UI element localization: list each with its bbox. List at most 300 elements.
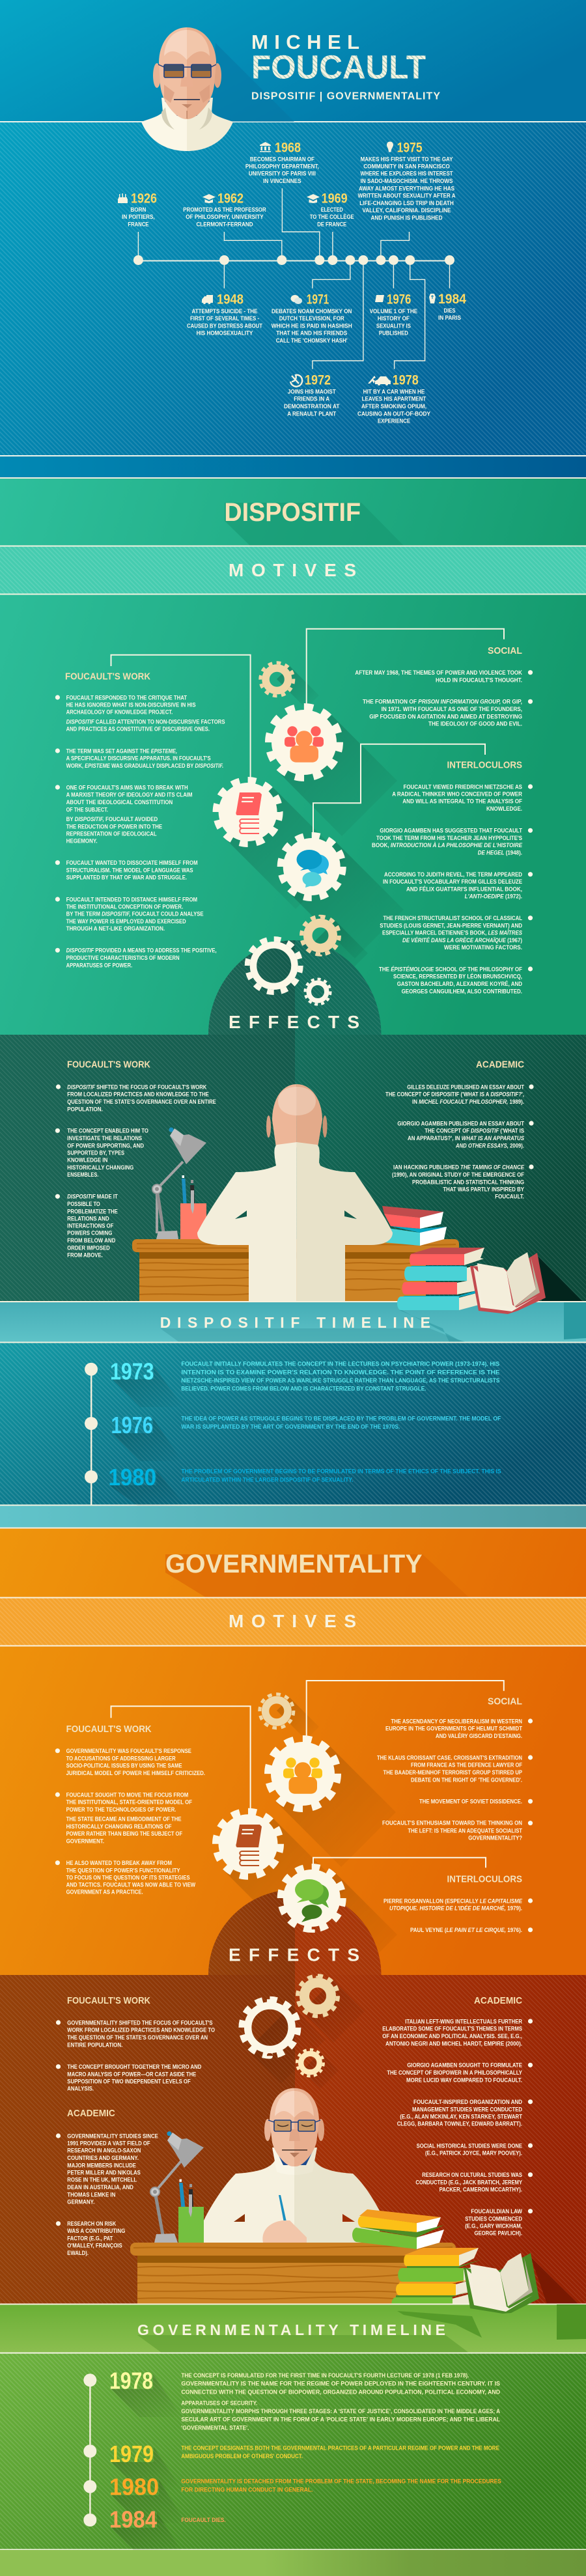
event 1948: HIS HOMOSEXUALITY	[197, 330, 253, 337]
gear shadows	[223, 666, 404, 1019]
text: motives foucault's work: POWER RATHER THAN BEING THE SUBJECT OF	[66, 1830, 182, 1837]
foreground book stack	[391, 2248, 482, 2311]
text: effects foucault's work: RELATIONS AND	[67, 1215, 109, 1222]
text: motives foucault's work: BY THE TERM DISPOSITIF, FOUCAULT COULD ANALYSE	[66, 911, 204, 917]
text: motives foucault's work: FOUCAULT'S WORK	[66, 1724, 152, 1735]
event 1978: EXPERIENCE	[378, 418, 410, 425]
text: effects foucault's work: ANALYSIS.	[67, 2086, 94, 2092]
text: motives interlocutors: INTERLOCULORS	[447, 1874, 522, 1885]
event 1969: ELECTED	[321, 206, 343, 213]
band: timeline heading	[0, 2304, 586, 2353]
text: motives foucault's work: AND PRACTICES AS CONSTITUTIVE OF DISCURSIVE ONES.	[66, 726, 210, 733]
text: motives social: GOVERNMENTALITY?	[468, 1835, 522, 1841]
event 1968: PHILOSOPHY DEPARTMENT,	[245, 163, 319, 169]
text: effects academic right: RESEARCH ON CULTURAL STUDIES WAS	[422, 2172, 522, 2178]
gear: interlocutors with speech bubbles	[281, 835, 343, 898]
event 1968: BECOMES CHAIRMAN OF	[250, 156, 314, 162]
text: effects academic right: GIORGIO AGAMBEN SOUGHT TO FORMULATE	[407, 2062, 522, 2069]
event 1975: MAKES HIS FIRST VISIT TO THE GAY	[361, 156, 453, 162]
text: motives interlocutors: DE HEGEL (1948).	[478, 849, 522, 856]
text: effects academic: PROBABILISTIC AND STATISTICAL THINKING	[412, 1179, 524, 1185]
text: effects foucault's work: QUESTION OF THE STATE'S GOVERNANCE OVER AN ENTIRE	[67, 1099, 216, 1105]
text: motives foucault's work: OF THE SUBJECT.	[66, 806, 108, 813]
event 1968: 1968	[275, 140, 301, 155]
figure: Foucault at desk	[204, 2088, 380, 2243]
text: effects foucault's work: POWERS COMING	[67, 1230, 112, 1237]
event 1975	[358, 140, 456, 221]
text: motives interlocutors: THE FRENCH STRUCTURALIST SCHOOL OF CLASSICAL	[383, 915, 522, 921]
event 1968: UNIVERSITY OF PARIS VIII	[249, 171, 316, 177]
event 1948: ATTEMPTS SUICIDE - THE	[191, 308, 258, 315]
title: MICHEL	[251, 31, 359, 53]
bottom band	[0, 1505, 586, 1528]
text: effects foucault's work: OF POWER SUPPORTING, AND	[67, 1142, 144, 1149]
text: effects academic left: ACADEMIC	[67, 2108, 115, 2119]
event 1978	[357, 373, 430, 425]
text: effects foucault's work: FROM BELOW AND	[67, 1237, 116, 1244]
text: effects academic: THAT WAS PARTLY INSPIRED BY	[443, 1186, 524, 1192]
connectors	[111, 1681, 504, 1868]
event 1976: HISTORY OF	[378, 315, 410, 322]
text: effects academic right	[382, 1995, 533, 2237]
text: effects academic right: THE CONCEPT OF BIOPOWER IN A PHILOSOPHICALLY	[387, 2069, 522, 2076]
text: motives foucault's work: GOVERNMENTALITY WAS FOUCAULT'S RESPONSE	[66, 1748, 191, 1754]
text: motives foucault's work: SOCIO-POLITICAL ISSUES BY USING THE SAME	[66, 1763, 182, 1769]
gear: large outline	[242, 1999, 298, 2056]
gear: social with people icon	[268, 1739, 337, 1809]
figure: Foucault from behind	[197, 1084, 393, 1302]
text: motives social: FROM FRANCE AS THE DEFENCE LAWYER OF	[411, 1762, 522, 1769]
text: motives foucault's work: TO FOCUS ON THE QUESTION OF ITS STRATEGIES	[66, 1874, 190, 1881]
text: effects academic left: 1991 PROVIDED A VAST FIELD OF	[67, 2140, 150, 2147]
text: effects academic right: ELABORATED SOME OF FOUCAULT'S THEMES IN TERMS	[382, 2026, 522, 2032]
text: motives social: EUROPE IN THE GOVERNMENTS OF HELMUT SCHMIDT	[385, 1726, 522, 1732]
entry 1973	[110, 1358, 500, 1393]
text: motives interlocutors: INTERLOCULORS	[447, 759, 522, 771]
text: motives foucault's work: A SPECIFICALLY DISCURSIVE APPARATUS. IN FOUCAULT'S	[66, 755, 211, 762]
text: motives foucault's work: POWER TO THE TECHNOLOGIES OF POWER.	[66, 1806, 176, 1813]
text: motives interlocutors: GIORGIO AGAMBEN HAS SUGGESTED THAT FOUCAULT	[380, 828, 522, 834]
event 1984: 1984	[438, 292, 466, 307]
event 1978: AFTER SMOKING OPIUM,	[361, 403, 426, 410]
entry 1976: WAR IS SUPPLANTED BY THE ART OF GOVERNMENT BY THE END OF THE 1970S.	[181, 1423, 400, 1431]
section: dispositif effects	[0, 1035, 586, 1302]
event 1976: SEXUALITY IS	[376, 322, 411, 329]
text: motives foucault's work: APPARATUSES OF POWER.	[66, 962, 132, 968]
dome: effects: EFFECTS	[229, 1012, 359, 1032]
text: motives foucault's work: FOUCAULT WANTED TO DISSOCIATE HIMSELF FROM	[66, 860, 198, 866]
timeline dots	[133, 255, 454, 265]
entry 1978: GOVERNMENTALITY IS THE NAME FOR THE REGIME OF POWER DEPLOYED IN THE EIGHTEENTH CENTURY. IT IS	[181, 2381, 501, 2388]
gear: large outline	[247, 939, 301, 992]
entry 1973: BELIEVED. POWER COMES FROM BELOW AND IS CHARACTERIZED BY CONSTANT STRUGGLE.	[181, 1386, 426, 1393]
text: motives foucault's work: THE QUESTION OF POWER'S FUNCTIONALITY	[66, 1867, 180, 1873]
entry 1980: 1980	[109, 2474, 159, 2500]
dome: effects	[208, 1890, 382, 1976]
text: effects foucault's work: THE CONCEPT ENABLED HIM TO	[67, 1128, 148, 1134]
dome: effects: EFFECTS	[229, 1944, 359, 1965]
bottom band	[0, 2550, 586, 2576]
event 1984	[429, 292, 466, 321]
event 1926: IN POITIERS,	[122, 214, 155, 220]
text: motives interlocutors: ACCORDING TO JUDITH REVEL, THE TERM APPEARED	[384, 871, 522, 878]
text: effects foucault's work: FOUCAULT'S WORK	[67, 1995, 150, 2006]
text: effects academic left: FACTOR (E.G., PAT	[67, 2235, 113, 2241]
gear: tan	[298, 1976, 338, 2016]
text: motives interlocutors: SCIENCE, REPRESENTED BY LÉON BRUNSCHVICQ,	[393, 973, 522, 980]
section: dispositif timeline	[0, 1248, 586, 1528]
event 1978: LEAVES HIS APARTMENT	[362, 396, 426, 402]
text: motives interlocutors: AND WILL AS INTEGRAL TO THE ANALYSIS OF	[402, 798, 522, 805]
text: effects academic right: FOUCAULDIAN LAW	[471, 2208, 522, 2215]
gear: small	[305, 979, 331, 1004]
text: motives foucault's work: DISPOSITIF CALLED ATTENTION TO NON-DISCURSIVE FACTORS	[66, 719, 225, 725]
event 1978: CAUSING AN OUT-OF-BODY	[357, 410, 430, 417]
text: motives foucault's work: HISTORICALLY CHANGING RELATIONS OF	[66, 1823, 172, 1830]
text: motives foucault's work: PRODUCTIVE CHARACTERISTICS OF MODERN	[66, 955, 180, 961]
text: motives interlocutors	[372, 759, 533, 994]
text: effects foucault's work: SUPPORTED BY, TYPES	[67, 1149, 124, 1156]
text: effects academic right: ACADEMIC	[474, 1995, 522, 2006]
text: effects foucault's work: WORK FROM LOCALIZED PRACTICES AND KNOWLEDGE TO	[67, 2027, 215, 2034]
band: motives: MOTIVES	[229, 560, 356, 580]
event 1969: TO THE COLLÈGE	[310, 213, 354, 220]
text: motives interlocutors: BOOK, INTRODUCTION À LA PHILOSOPHIE DE L'HISTOIRE	[372, 842, 523, 848]
text: motives foucault's work: STRUCTURALISM. THE MODEL OF LANGUAGE WAS	[66, 867, 193, 873]
text: motives interlocutors: GASTON BACHELARD, ALEXANDRE KOYRÉ, AND	[397, 980, 522, 987]
text: motives foucault's work: THE WAY POWER IS EMPLOYED AND EXERCISED	[66, 918, 186, 925]
text: motives social: THE MOVEMENT OF SOVIET DISSIDENCE.	[419, 1799, 522, 1805]
gear: foucault's work with book icon	[216, 1812, 281, 1877]
text: motives foucault's work: JURIDICAL MODEL OF POWER HE HIMSELF CRITICIZED.	[66, 1770, 205, 1776]
text: motives foucault's work: WORK, EPISTEME WAS GRADUALLY DISPLACED BY DISPOSITIF.	[66, 763, 223, 769]
lamp	[152, 1127, 206, 1239]
event 1962: 1962	[217, 191, 244, 206]
event 1971: THAT HE AND HIS FRIENDS	[276, 330, 347, 337]
text: motives interlocutors: ESPECIALLY MARCEL DETIENNE'S BOOK, LES MAÎTRES	[382, 929, 523, 936]
text: effects academic left: THOMAS LEMKE IN	[67, 2191, 116, 2198]
event 1976: 1976	[387, 292, 411, 307]
gear shadows	[247, 1980, 365, 2089]
entry 1973: NIETZSCHE-INSPIRED VIEW OF POWER AS WARLIKE STRUGGLE RATHER THAN LANGUAGE, AS THE STRUCTURALISTS	[181, 1377, 500, 1384]
gear: interlocutors with speech bubbles	[281, 1867, 343, 1929]
text: motives foucault's work	[55, 671, 225, 968]
entry 1980: FOR DIRECTING HUMAN CONDUCT IN GENERAL.	[181, 2486, 313, 2493]
text: effects academic left: RESEARCH ON RISK	[67, 2220, 117, 2227]
event 1975: COMMUNITY IN SAN FRANCISCO	[363, 163, 450, 169]
section: governmentality timeline	[0, 2253, 586, 2576]
text: effects academic: GIORGIO AGAMBEN PUBLISHED AN ESSAY ABOUT	[397, 1120, 524, 1127]
section: governmentality effects	[0, 1975, 586, 2311]
text: effects academic: ACADEMIC	[476, 1059, 524, 1071]
event 1972: FRIENDS IN A	[294, 396, 330, 402]
event 1975: LIFE-CHANGING LSD TRIP IN DEATH	[359, 200, 454, 206]
text: effects foucault's work: MACRO ANALYSIS OF POWER—OR CAST ASIDE THE	[67, 2071, 196, 2077]
entry 1984: FOUCAULT DIES.	[181, 2517, 226, 2524]
text: motives social: AFTER MAY 1968, THE THEMES OF POWER AND VIOLENCE TOOK	[355, 669, 522, 676]
text: effects foucault's work: GOVERNMENTALITY SHIFTED THE FOCUS OF FOUCAULT'S	[67, 2019, 213, 2026]
text: effects academic right: ITALIAN LEFT-WING INTELLECTUALS FURTHER	[405, 2018, 522, 2024]
event 1978: HIT BY A CAR WHEN HE	[363, 389, 425, 395]
gear: small tan	[260, 663, 294, 696]
text: effects foucault's work: POSSIBLE TO	[67, 1201, 100, 1207]
text: motives social: SOCIAL	[488, 1696, 522, 1707]
text: motives foucault's work: THROUGH A NET-LIKE ORGANIZATION.	[66, 925, 165, 932]
heading: DISPOSITIF: DISPOSITIF	[224, 498, 361, 527]
text: effects academic left: DEAN IN AUSTRALIA, AND	[67, 2184, 133, 2191]
band: motives	[0, 1597, 586, 1646]
entry 1973: FOUCAULT INITIALLY FORMULATES THE CONCEPT IN THE LECTURES ON PSYCHIATRIC POWER (1973-1974). HIS	[181, 1361, 500, 1368]
text: motives social	[377, 1696, 533, 1841]
biography timeline connectors	[138, 188, 450, 369]
entry 1976: THE IDEA OF POWER AS STRUGGLE BEGINS TO BE DISPLACED BY THE PROBLEM OF GOVERNMENT. THE MODEL OF	[181, 1416, 501, 1423]
text: effects academic right: (E.G., ALAN MCKINLAY, KEN STARKEY, STEWART	[400, 2113, 522, 2120]
heading: GOVERNMENTALITY	[165, 1550, 469, 1597]
text: motives social: SOCIAL	[488, 645, 522, 656]
event 1948	[187, 292, 262, 337]
text: motives foucault's work: FOUCAULT RESPONDED TO THE CRITIQUE THAT	[66, 694, 187, 701]
text: motives foucault's work: GOVERNMENT AS A PRACTICE.	[66, 1889, 143, 1896]
pen cup	[180, 1175, 206, 1239]
event 1972: JOINS HIS MAOIST	[288, 389, 336, 395]
event 1975: AND PUNISH IS PUBLISHED	[371, 214, 443, 221]
text: effects foucault's work: FOUCAULT'S WORK	[67, 1059, 150, 1071]
text: motives foucault's work: ARCHAEOLOGY OF KNOWLEDGE PROJECT.	[66, 709, 173, 716]
text: effects academic right: (E.G., GARY WICKHAM,	[465, 2223, 522, 2230]
text: motives interlocutors: IN FOUCAULT'S VOCABULARY FROM GILLES DELEUZE	[383, 878, 522, 885]
open book	[464, 2253, 539, 2314]
event 1984: DIES	[444, 307, 456, 314]
text: motives foucault's work: THE REDUCTION OF POWER INTO THE	[66, 823, 162, 830]
text: motives foucault's work: AND TACTICS. FOUCAULT WAS NOW ABLE TO VIEW	[66, 1882, 195, 1888]
icon: glasses	[268, 2120, 320, 2131]
title	[251, 31, 440, 102]
entry 1978: CONNECTED WITH THE QUESTION OF BIOPOWER, ORGANIZED AROUND POPULATION, POLITICAL ECONOMY, AND	[181, 2388, 500, 2396]
year shadows	[111, 2374, 186, 2556]
text: motives social: IN 1971. WITH FOUCAULT AS ONE OF THE FOUNDERS,	[382, 706, 522, 712]
text: effects academic: FOUCAULT.	[495, 1194, 524, 1200]
text: effects academic right: STUDIES COMMENCED	[465, 2215, 522, 2222]
text: motives social: DEBATE ON THE RIGHT OF 'THE GOVERNED'.	[411, 1776, 522, 1783]
entry 1979	[109, 2441, 499, 2467]
text: motives interlocutors: TOOK THE TERM FROM HIS TEACHER JEAN HYPPOLITE'S	[376, 835, 522, 841]
text: motives foucault's work: THE INSTITUTIONAL, STATE-ORIENTED MODEL OF	[66, 1799, 192, 1806]
entry 1973: 1973	[110, 1358, 154, 1384]
event 1962: CLERMONT-FERRAND	[197, 221, 253, 227]
event 1971: CALL THE 'CHOMSKY HASH'	[276, 337, 348, 344]
text: motives interlocutors: L'ANTI-OEDIPE (1972).	[465, 893, 522, 900]
event 1971: DUTCH TELEVISION, FOR	[279, 315, 344, 322]
text: motives foucault's work: FOUCAULT SOUGHT TO MOVE THE FOCUS FROM	[66, 1791, 189, 1798]
text: motives foucault's work: ONE OF FOUCAULT'S AIMS WAS TO BREAK WITH	[66, 784, 188, 791]
text: motives foucault's work	[55, 1724, 205, 1896]
text: effects academic right: CONDUCTED (E.G., JACK BRATICH, JEREMY	[415, 2179, 522, 2185]
text: motives interlocutors: DE VÉRITÉ DANS LA GRÈCE ARCHAÏQUE (1967)	[402, 937, 522, 944]
text: motives interlocutors: STUDIES (LOUIS GERNET, JEAN-PIERRE VERNANT) AND	[380, 922, 522, 929]
event 1975: VALLEY, CALIFORNIA. DISCIPLINE	[362, 207, 451, 214]
heading: GOVERNMENTALITY: GOVERNMENTALITY	[165, 1550, 423, 1578]
icon: glasses	[158, 64, 216, 77]
event 1971: WHICH HE IS PAID IN HASHISH	[272, 322, 352, 329]
entry 1980: THE PROBLEM OF GOVERNMENT BEGINS TO BE FORMULATED IN TERMS OF THE ETHICS OF THE SUBJECT. THIS IS	[181, 1468, 501, 1476]
text: motives social: THE IDEOLOGY OF GOOD AND EVIL.	[428, 720, 522, 727]
title: FOUCAULT	[251, 49, 426, 86]
text: motives foucault's work: FOUCAULT'S WORK	[65, 671, 150, 682]
event 1971: DEBATES NOAM CHOMSKY ON	[272, 308, 352, 315]
text: effects academic right: MANAGEMENT STUDIES WERE CONDUCTED	[412, 2106, 522, 2112]
event 1972	[284, 373, 340, 417]
text: motives interlocutors: AND FÉLIX GUATTARI'S INFLUENTIAL BOOK,	[406, 885, 522, 892]
dome: effects	[208, 940, 382, 1035]
text: effects foucault's work: DISPOSITIF MADE IT	[67, 1194, 118, 1200]
entry 1980: 1980	[108, 1464, 156, 1491]
gear: social with people icon	[268, 707, 340, 777]
band: motives: MOTIVES	[229, 1611, 356, 1631]
text: motives social: THE KLAUS CROISSANT CASE. CROISSANT'S EXTRADITION	[377, 1754, 522, 1761]
text: effects foucault's work: POPULATION.	[67, 1106, 103, 1112]
band: timeline heading: DISPOSITIF TIMELINE	[160, 1314, 430, 1331]
text: motives social: AND VALÉRY GISCARD D'ESTAING.	[436, 1732, 522, 1739]
text: motives foucault's work: DISPOSITIF PROVIDED A MEANS TO ADDRESS THE POSITIVE,	[66, 947, 217, 954]
text: motives foucault's work: HE HAS IGNORED WHAT IS NON-DISCURSIVE IN HIS	[66, 702, 196, 708]
text: motives foucault's work: SUPPLANTED BY THAT OF WAR AND STRUGGLE.	[66, 875, 187, 881]
entry 1978: 'GOVERNMENTAL STATE'.	[181, 2424, 249, 2431]
pen cup	[178, 2179, 204, 2243]
event 1978: 1978	[393, 373, 419, 388]
text: motives foucault's work: BY DISPOSITIF, FOUCAULT AVOIDED	[66, 816, 158, 822]
white divider	[0, 1301, 586, 1302]
text: effects academic left	[56, 2108, 158, 2256]
text: effects foucault's work: DISPOSITIF SHIFTED THE FOCUS OF FOUCAULT'S WORK	[67, 1084, 207, 1090]
header section	[0, 0, 586, 479]
text: effects academic right: OF AN ECONOMIC AND POLITICAL ANALYSIS. SEE, E.G.,	[382, 2033, 522, 2039]
text: effects academic: AND OTHER ESSAYS, 2009).	[455, 1142, 524, 1149]
text: motives interlocutors	[384, 1874, 533, 1933]
event 1976	[370, 292, 417, 337]
text: effects academic right: FOUCAULT-INSPIRED ORGANIZATION AND	[413, 2099, 522, 2105]
entry 1979: AMBIGUOUS PROBLEM OF OTHERS' CONDUCT.	[181, 2453, 303, 2460]
text: motives foucault's work: FOUCAULT INTENDED TO DISTANCE HIMSELF FROM	[66, 896, 197, 903]
text: effects foucault's work: INTERACTIONS OF	[67, 1223, 114, 1229]
text: motives interlocutors: FOUCAULT VIEWED FRIEDRICH NIETZSCHE AS	[404, 783, 522, 790]
text: effects academic: AN APPARATUS?', IN WHAT IS AN APPARATUS	[408, 1135, 525, 1141]
text: motives social	[355, 645, 533, 727]
text: effects foucault's work	[56, 1995, 215, 2092]
text: motives interlocutors: GEORGES CANGUILHEM, ALSO CONTRIBUTED.	[402, 988, 522, 994]
icon: portrait shadow	[212, 43, 294, 122]
text: effects academic right: GEORGE PAVLICH).	[474, 2230, 522, 2237]
panel: timeline	[0, 2352, 586, 2556]
text: effects foucault's work: KNOWLEDGE IN	[67, 1157, 108, 1164]
text: motives social: THE ASCENDANCY OF NEOLIBERALISM IN WESTERN	[391, 1718, 522, 1724]
entry 1979: THE CONCEPT DESIGNATES BOTH THE GOVERNMENTAL PRACTICES OF A PARTICULAR REGIME OF POWER AND THE MORE	[181, 2444, 499, 2452]
text: effects academic: GILLES DELEUZE PUBLISHED AN ESSAY ABOUT	[407, 1084, 524, 1090]
event 1926: FRANCE	[128, 221, 148, 227]
desk	[132, 1239, 459, 1301]
text: motives interlocutors: PIERRE ROSANVALLON (ESPECIALLY LE CAPITALISME	[384, 1897, 523, 1904]
entry 1979: 1979	[109, 2441, 154, 2467]
lamp	[150, 2131, 204, 2243]
text: motives social: THE FORMATION OF PRISON INFORMATION GROUP, OR GIP,	[363, 699, 522, 705]
event 1984: IN PARIS	[438, 315, 461, 321]
text: effects academic: THE CONCEPT OF DISPOSITIF ('WHAT IS	[425, 1128, 524, 1134]
text: effects foucault's work: ORDER IMPOSED	[67, 1244, 110, 1251]
event 1948: FIRST OF SEVERAL TIMES -	[190, 315, 259, 322]
entry 1976	[111, 1412, 501, 1438]
gear: tan	[301, 917, 339, 955]
text: effects academic left: MAJOR MEMBERS INCLUDE	[67, 2162, 136, 2168]
gear: foucault's work with book icon	[216, 780, 280, 844]
entry 1976: 1976	[111, 1412, 153, 1438]
text: motives foucault's work: REPRESENTATION OF IDEOLOGICAL	[66, 830, 157, 837]
text: motives social: FOUCAULT'S ENTHUSIASM TOWARD THE THINKING ON	[382, 1820, 522, 1827]
event 1968	[245, 140, 319, 184]
entry 1980	[109, 2474, 501, 2500]
entry 1980: ARTICULATED WITHIN THE LARGER DISPOSITIF OF SEXUALITY.	[181, 1476, 353, 1483]
heading: DISPOSITIF	[224, 498, 404, 546]
text: effects academic: THE CONCEPT OF DISPOSITIF ('WHAT IS A DISPOSITIF?',	[385, 1091, 524, 1098]
text: effects academic left: RESEARCH IN ANGLO-SAXON	[67, 2148, 141, 2154]
book shadow	[538, 1257, 586, 1302]
text: effects academic right: CLEGG, BARBARA TOWNLEY, EDWARD BARRATT).	[397, 2121, 522, 2127]
text: effects academic right: ANTONIO NEGRI AND MICHEL HARDT, EMPIRE (2000).	[385, 2040, 522, 2047]
text: effects academic left: PETER MILLER AND NIKOLAS	[67, 2169, 141, 2176]
event 1975: WHERE HE EXPLORES HIS INTEREST	[361, 171, 453, 177]
event 1962	[183, 191, 266, 227]
event 1976: PUBLISHED	[379, 330, 408, 337]
title: DISPOSITIF | GOVERNMENTALITY	[251, 91, 440, 102]
event 1972: 1972	[305, 373, 331, 388]
entry 1984	[109, 2506, 226, 2533]
event 1975: WRITTEN ABOUT SEXUALITY AFTER A	[358, 192, 456, 199]
text: motives foucault's work: GOVERNMENT.	[66, 1838, 104, 1844]
entry 1984: 1984	[109, 2506, 157, 2533]
desk	[130, 2243, 456, 2304]
band: motives	[0, 546, 586, 595]
text: motives foucault's work: THE TERM WAS SET AGAINST THE EPISTEME,	[66, 748, 177, 754]
portrait of Michel Foucault	[141, 27, 233, 151]
event 1976: VOLUME 1 OF THE	[370, 308, 417, 315]
entry 1980	[108, 1464, 501, 1491]
section: governmentality	[0, 1528, 586, 1984]
text: effects academic: (1990), AN ORIGINAL STUDY OF THE EMERGENCE OF	[392, 1171, 524, 1178]
text: motives interlocutors: WERE MOTIVATING FACTORS.	[444, 944, 522, 951]
gear: small	[297, 2050, 324, 2076]
gear: small tan	[260, 1694, 294, 1728]
icon: hand with pen	[262, 2195, 307, 2243]
text: motives foucault's work: A MARXIST THEORY OF IDEOLOGY AND ITS CLAIM	[66, 792, 193, 798]
text: effects academic left: O'MALLEY, FRANÇOIS	[67, 2243, 122, 2249]
text: motives social: HOLD IN FOUCAULT'S THOUGHT.	[436, 677, 522, 683]
entry 1978	[109, 2368, 501, 2431]
entry 1978: THE CONCEPT IS FORMULATED FOR THE FIRST TIME IN FOUCAULT'S FOURTH LECTURE OF 1978 (1 FEB 1978).	[181, 2372, 469, 2379]
text: effects academic: IAN HACKING PUBLISHED THE TAMING OF CHANCE	[393, 1164, 525, 1171]
text: effects foucault's work: ENSEMBLES.	[67, 1171, 98, 1178]
text: effects foucault's work: INVESTIGATE THE RELATIONS	[67, 1135, 142, 1141]
event 1948: 1948	[217, 292, 244, 307]
event 1948: CAUSED BY DISTRESS ABOUT	[187, 322, 262, 329]
event 1975: AWAY ALMOST EVERYTHING HE HAS	[359, 185, 454, 191]
book stack behind figure	[382, 1206, 447, 1246]
gear shadows	[223, 1698, 397, 1984]
band: timeline heading	[0, 1302, 586, 1343]
event 1926: 1926	[131, 191, 157, 206]
text: effects academic right: (E.G., PATRICK JOYCE, MARY POOVEY).	[425, 2149, 522, 2156]
event 1972: DEMONSTRATION AT	[284, 403, 340, 410]
event 1969	[307, 191, 354, 227]
event 1926: BORN	[130, 206, 146, 213]
band: timeline heading: GOVERNMENTALITY TIMELINE	[137, 2321, 445, 2338]
